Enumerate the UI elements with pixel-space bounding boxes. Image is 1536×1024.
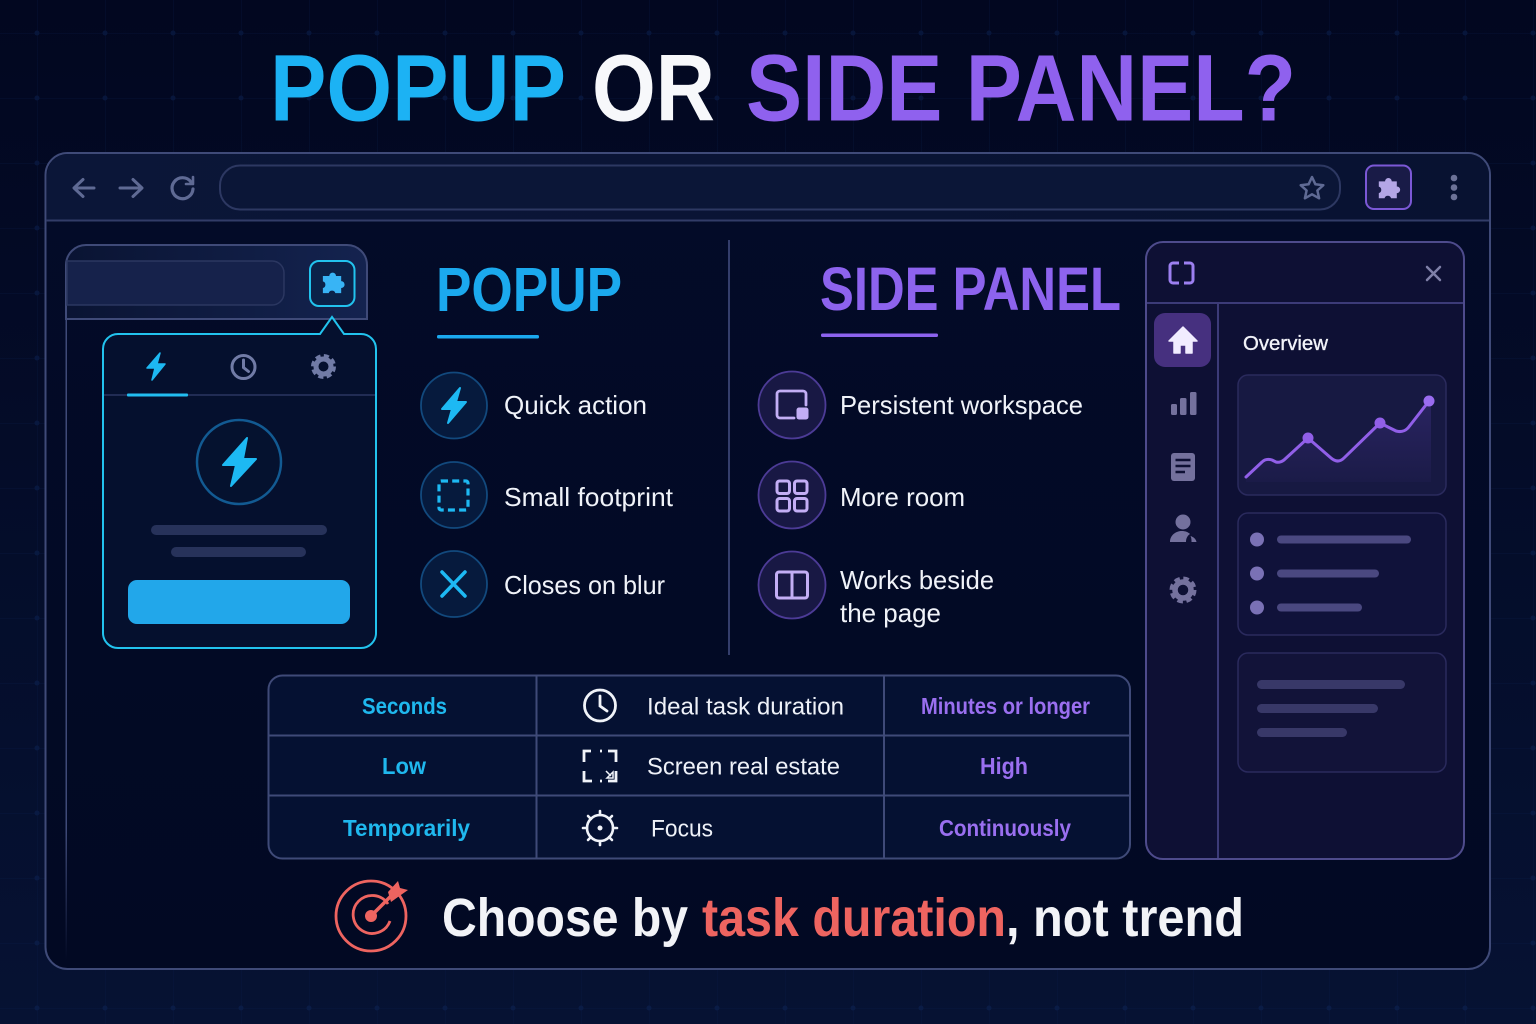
action button <box>128 580 350 624</box>
placeholder lines <box>151 525 327 557</box>
feature: works beside the page: Works beside <box>840 565 994 595</box>
tab: settings gear <box>313 356 334 377</box>
icon: forward arrow <box>120 180 142 196</box>
icon: panel brackets <box>1170 263 1193 283</box>
row: focus: Continuously <box>939 815 1071 841</box>
row: ideal task duration: Minutes or longer <box>921 693 1090 719</box>
label: Persistent workspace <box>840 390 1083 420</box>
tab: history clock <box>232 356 255 378</box>
feature: closes on blur <box>421 551 665 617</box>
takeaway text: , not trend <box>1006 888 1244 948</box>
browser toolbar <box>46 154 1489 220</box>
popup window <box>103 317 376 648</box>
text card <box>1238 653 1446 772</box>
feature: more room <box>758 462 965 528</box>
icon: back arrow <box>74 180 94 196</box>
icon: reload <box>172 177 193 199</box>
row: focus: Focus <box>651 816 713 842</box>
feature: persistent workspace <box>758 372 1083 438</box>
icon: target <box>336 881 408 951</box>
feature: more room: More room <box>840 482 965 512</box>
footer takeaway <box>336 881 1244 951</box>
row: ideal task duration: Ideal task duration <box>647 694 844 720</box>
nav: document <box>1171 453 1195 481</box>
title: POPUP <box>270 36 566 142</box>
extension button <box>1366 166 1411 209</box>
row: screen real estate: Low <box>382 753 426 779</box>
tab: quick action <box>127 353 188 396</box>
nav: home <box>1154 313 1211 367</box>
page edge line <box>66 300 67 960</box>
row: ideal task duration: Seconds <box>362 693 447 719</box>
takeaway text: Choose by <box>442 888 688 948</box>
icon: close <box>1427 267 1440 280</box>
extension button active <box>310 261 354 306</box>
panel: popup features <box>421 256 674 617</box>
overview label: Overview <box>1243 333 1329 355</box>
panel: side panel features <box>758 255 1121 628</box>
mini browser bar <box>66 245 367 319</box>
title: OR <box>592 36 715 142</box>
line chart card <box>1238 375 1446 495</box>
feature: closes on blur: Closes on blur <box>504 570 665 600</box>
feature: small footprint <box>421 462 674 528</box>
row: screen real estate: Screen real estate <box>647 754 840 780</box>
title: SIDE PANEL? <box>746 36 1296 142</box>
side panel illustration <box>1146 242 1464 859</box>
feature: quick action: Quick action <box>504 390 647 420</box>
feature: quick action <box>421 372 647 438</box>
nav: bars <box>1171 392 1196 415</box>
row: focus: Temporarily <box>343 815 470 841</box>
feature: works beside the page: the page <box>840 598 941 628</box>
icon: menu dots <box>1451 175 1457 200</box>
feature: small footprint: Small footprint <box>504 482 674 512</box>
row: focus <box>343 811 1071 845</box>
list card <box>1238 513 1446 635</box>
nav: gear <box>1172 578 1194 602</box>
icon: star <box>1301 177 1323 198</box>
heading: popup: POPUP <box>436 256 622 325</box>
feature: works beside the page <box>758 552 994 628</box>
address bar <box>220 166 1340 210</box>
popup illustration <box>66 245 376 648</box>
takeaway text <box>442 888 1244 948</box>
heading: side panel: SIDE PANEL <box>820 255 1121 323</box>
row: screen real estate: High <box>980 753 1028 779</box>
row: ideal task duration <box>362 690 1090 721</box>
comparison table <box>268 676 1130 858</box>
icon: large bolt <box>197 420 281 504</box>
takeaway text: task duration <box>702 888 1006 948</box>
title <box>270 36 1296 142</box>
row: screen real estate <box>382 751 1028 781</box>
nav: person <box>1170 514 1196 542</box>
browser window <box>46 153 1490 969</box>
